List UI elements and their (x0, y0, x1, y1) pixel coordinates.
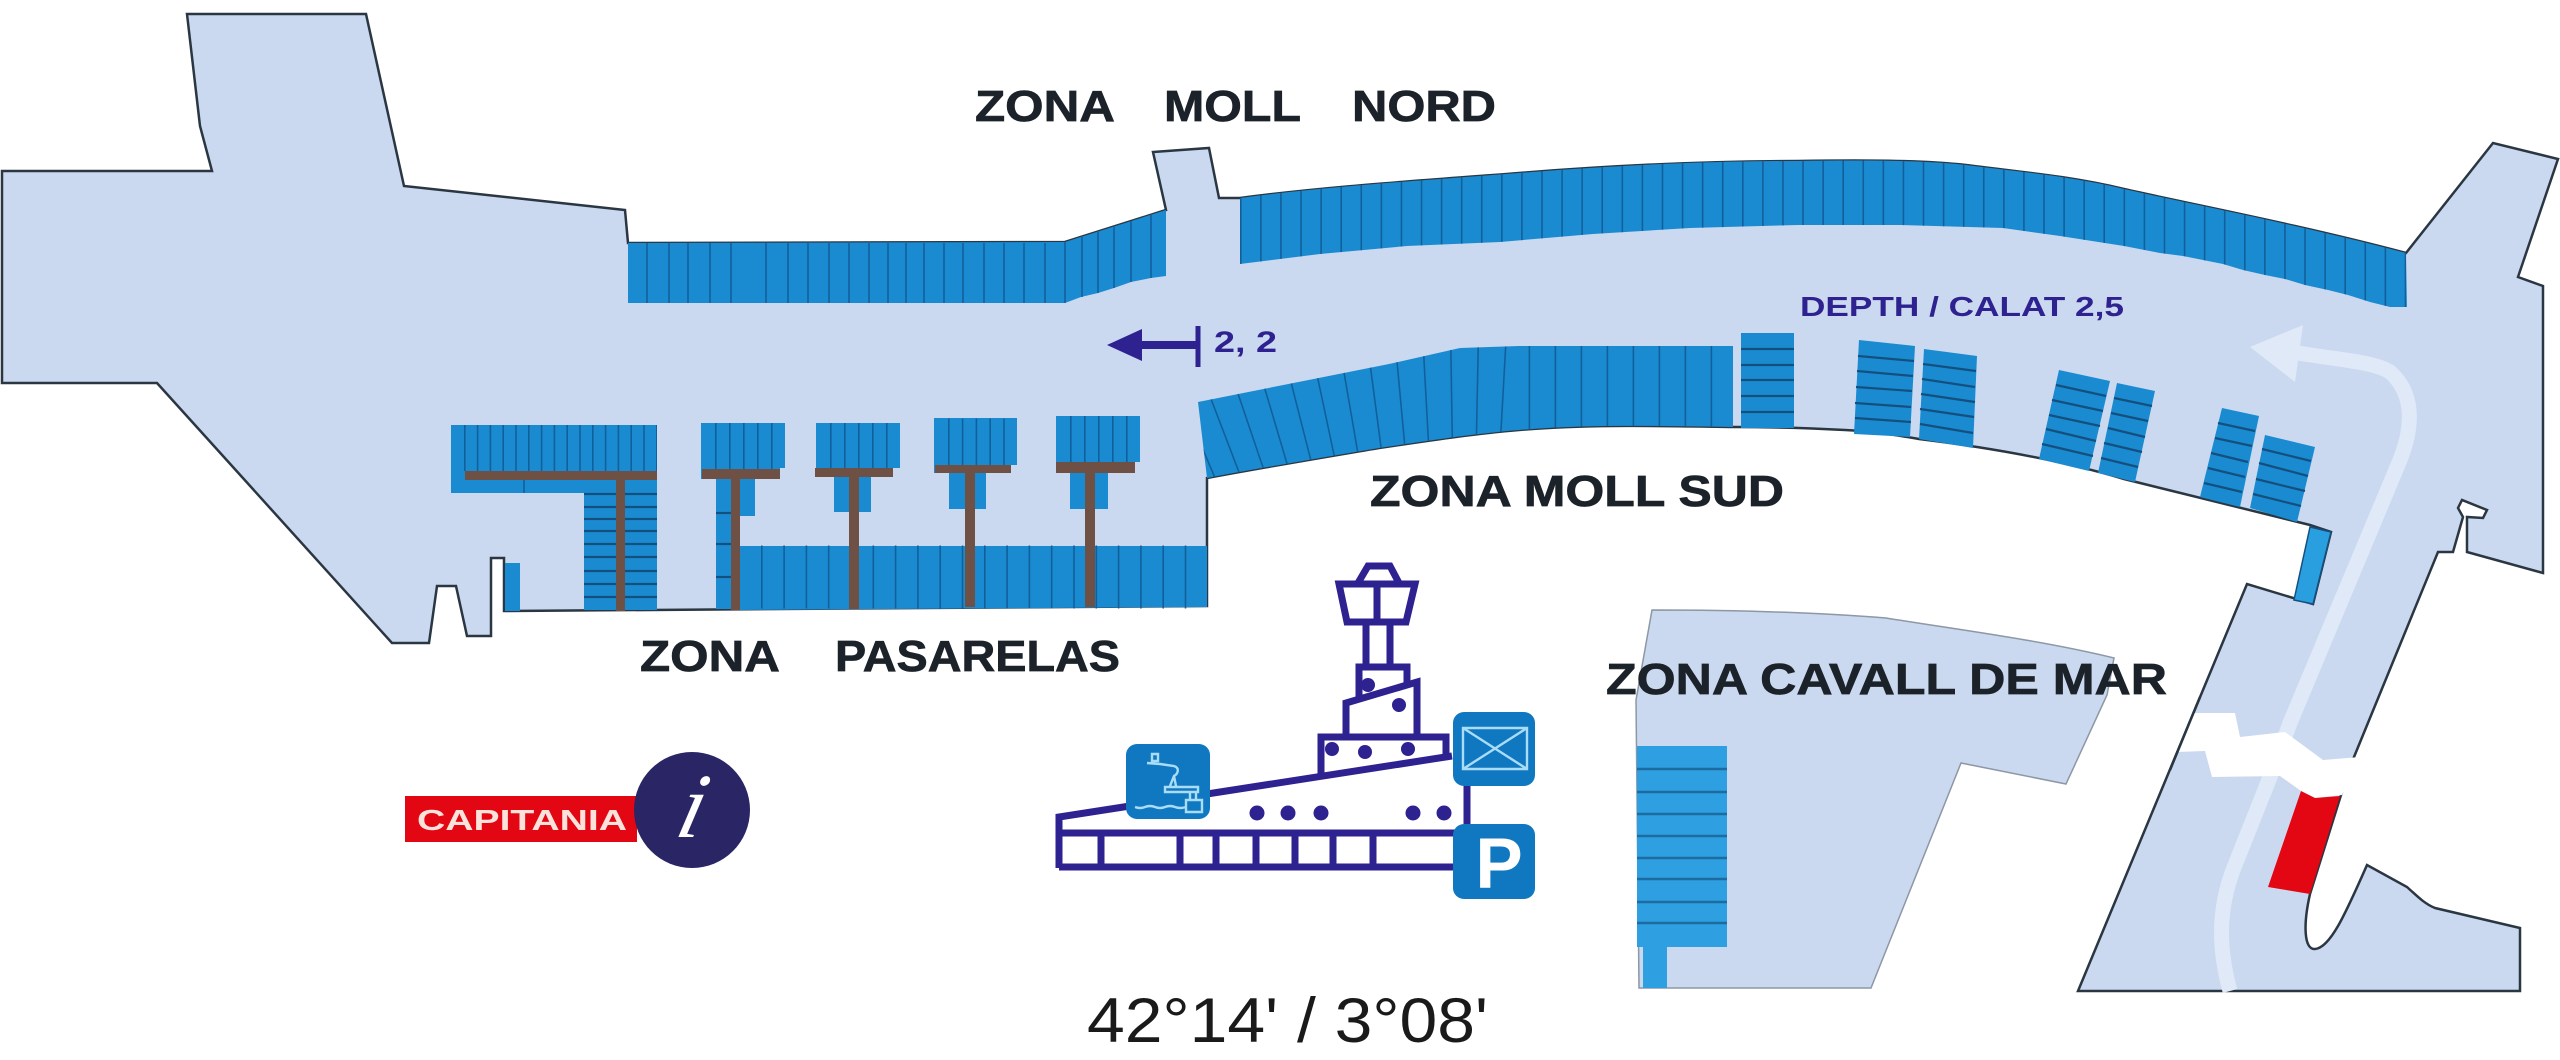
label: zona pasarelas: ZONA (640, 632, 780, 681)
small berth by notch (505, 563, 520, 611)
depth arrow 2,2 (1107, 326, 1277, 367)
label: zona moll nord: ZONA (975, 82, 1115, 131)
label: zona pasarelas: PASARELAS (835, 632, 1120, 681)
icon: parking (1453, 824, 1535, 904)
berths: north quay east (1240, 160, 2407, 307)
label: depth: DEPTH / CALAT 2,5 (1800, 291, 2124, 322)
icon: parking: P (1475, 825, 1523, 904)
icon: diving / boat lift (1126, 744, 1210, 819)
coordinates: 42°14' / 3°08' (1087, 986, 1488, 1056)
red berth highlight (2268, 791, 2340, 894)
white gap across pier (2177, 713, 2360, 798)
berths: pasarelas bottom row (739, 546, 1207, 610)
label: zona moll sud: ZONA MOLL SUD (1370, 467, 1784, 516)
label: zona cavall de mar: ZONA CAVALL DE MAR (1606, 655, 2167, 704)
capitania marker: i (668, 756, 719, 858)
icon: mail (1453, 712, 1535, 786)
land: zona Cavall de Mar (1636, 610, 2114, 988)
pontoon 4 (934, 418, 1017, 607)
label: zona moll nord (975, 82, 1496, 131)
pontoon 1 (451, 425, 657, 611)
capitania marker: CAPITANIA (417, 805, 627, 837)
pontoon 2 (701, 423, 785, 610)
pier west edge through the gap (2170, 697, 2200, 770)
pontoon 3 (815, 423, 900, 609)
berths: Cavall de Mar (1637, 746, 1727, 988)
pontoon 5 (1056, 416, 1140, 607)
berths: north quay west (628, 210, 1166, 303)
info circle (634, 752, 750, 868)
label: zona pasarelas (640, 632, 1120, 681)
capitania marker (405, 752, 750, 868)
berths: south quay fingers (1741, 333, 2331, 604)
port building icon (1059, 566, 1467, 868)
berths: south quay curve (1198, 346, 1733, 478)
depth arrow 2,2: 2, 2 (1214, 326, 1277, 359)
road route arrow (2222, 325, 2409, 991)
label: zona moll nord: MOLL (1164, 82, 1301, 131)
label: zona moll nord: NORD (1352, 82, 1496, 131)
